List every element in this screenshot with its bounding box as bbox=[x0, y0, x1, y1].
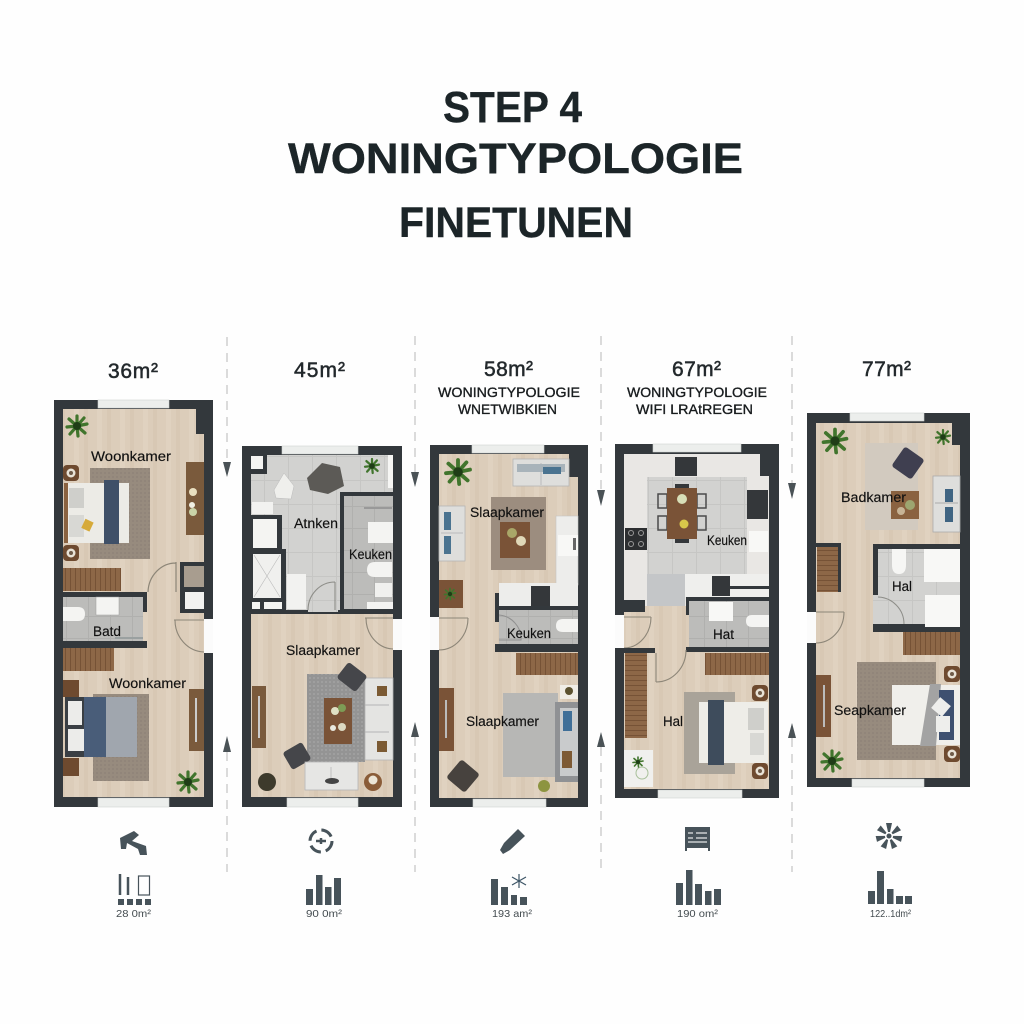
tv console bbox=[252, 686, 266, 748]
sofa top bbox=[513, 459, 569, 486]
panel: floor plan 45m2 bbox=[242, 446, 402, 807]
panel: floor plan 58m2: Slaapkamer bbox=[470, 505, 545, 520]
bar chart: 190 om2 bbox=[676, 870, 721, 920]
console bbox=[186, 462, 204, 535]
icon: target 45m2 bbox=[310, 830, 332, 852]
sofa left bbox=[439, 506, 465, 561]
bar chart: 122..1dm2: 122..1dm² bbox=[870, 908, 911, 920]
panel: floor plan 45m2: Keuken bbox=[349, 547, 392, 562]
title: FINETUNEN bbox=[399, 199, 633, 247]
arrow: divider 2 bbox=[411, 336, 419, 872]
size heading and subtitle: 67m2: WIFI LRAtREGEN bbox=[636, 401, 753, 417]
icon: fan 77m2 bbox=[876, 823, 902, 849]
counter bbox=[685, 574, 769, 601]
panel: floor plan 67m2: Keuken bbox=[707, 533, 747, 548]
panel: floor plan 36m2: Woonkamer bbox=[91, 449, 172, 464]
panel: floor plan 77m2: Badkamer bbox=[841, 490, 907, 505]
bed bbox=[892, 684, 960, 746]
size heading: 36m2: 36m² bbox=[108, 360, 158, 383]
sofa bbox=[933, 476, 960, 532]
title bbox=[288, 83, 743, 247]
panel: floor plan 36m2: Batd bbox=[93, 624, 121, 639]
bar chart: 190 om2: 190 om² bbox=[677, 908, 719, 920]
panel: floor plan 77m2 bbox=[807, 413, 970, 787]
panel: floor plan 67m2 bbox=[615, 444, 779, 798]
bathroom bbox=[873, 544, 960, 632]
counter bbox=[495, 583, 578, 610]
bathroom bbox=[686, 601, 769, 652]
closet bbox=[180, 562, 204, 613]
keuken room bbox=[340, 492, 393, 614]
bar chart: 90 0m2 bbox=[306, 875, 343, 920]
console bbox=[439, 688, 454, 751]
bed bbox=[64, 480, 129, 544]
icon: cabinet 67m2 bbox=[685, 827, 710, 851]
dining table bbox=[658, 484, 706, 543]
bar chart: 193 am2: 193 am² bbox=[492, 908, 533, 920]
icon: tools with area 28 0m2 bbox=[116, 874, 152, 920]
icon: furniture 36m2 bbox=[120, 831, 147, 855]
sofa grey bbox=[555, 702, 578, 782]
bed bbox=[699, 700, 768, 765]
bed bbox=[65, 694, 149, 781]
panel: floor plan 77m2: Hal bbox=[892, 579, 912, 594]
panel: floor plan 36m2: Woonkamer bbox=[109, 676, 187, 691]
size heading and subtitle: 58m2 bbox=[438, 358, 580, 417]
storage blocks bbox=[251, 455, 393, 514]
arrow: divider 1 bbox=[223, 337, 231, 872]
size heading and subtitle: 58m2: WNETWIBKIEN bbox=[458, 401, 557, 417]
table bbox=[891, 491, 919, 519]
panel: floor plan 67m2: Hal bbox=[663, 714, 683, 729]
table bbox=[500, 522, 530, 558]
panel: floor plan 58m2 bbox=[430, 445, 588, 807]
panel: floor plan 58m2: Slaapkamer bbox=[466, 714, 539, 729]
bathroom bbox=[63, 592, 147, 648]
title: STEP 4 bbox=[443, 83, 582, 132]
panel: floor plan 77m2: Seapkamer bbox=[834, 703, 907, 718]
size heading and subtitle: 58m2: WONINGTYPOLOGIE bbox=[438, 384, 580, 400]
side table bbox=[439, 580, 463, 608]
size heading and subtitle: 67m2: 67m² bbox=[672, 358, 721, 381]
title: WONINGTYPOLOGIE bbox=[288, 135, 743, 183]
kitchen unit bbox=[556, 516, 578, 585]
coffee table bbox=[324, 698, 352, 744]
bar chart: 90 0m2: 90 0m² bbox=[306, 908, 343, 920]
bathroom bbox=[495, 610, 578, 652]
panel: floor plan 45m2: Slaapkamer bbox=[286, 643, 361, 658]
side table bbox=[624, 750, 653, 787]
tv console bbox=[816, 675, 831, 737]
panel: floor plan 58m2: Keuken bbox=[507, 626, 551, 641]
bar chart: 193 am2 bbox=[491, 874, 533, 920]
size heading and subtitle: 58m2: 58m² bbox=[484, 358, 533, 381]
stove bbox=[625, 528, 647, 550]
tv console bbox=[189, 689, 204, 751]
size heading: 45m2: 45m² bbox=[294, 359, 345, 382]
size heading and subtitle: 67m2: WONINGTYPOLOGIE bbox=[627, 384, 767, 400]
panel: floor plan 36m2 bbox=[54, 400, 213, 807]
bar chart: 122..1dm2 bbox=[868, 871, 912, 920]
storage left bbox=[816, 543, 841, 592]
icon: tools with area 28 0m2: 28 0m² bbox=[116, 908, 152, 920]
arrow: divider 4 bbox=[788, 336, 796, 872]
size heading: 77m2: 77m² bbox=[862, 358, 911, 381]
sofa right bbox=[365, 678, 393, 760]
wet cells bbox=[251, 515, 286, 610]
panel: floor plan 45m2: Atnken bbox=[294, 516, 338, 531]
sofa bottom bbox=[305, 762, 358, 790]
size heading and subtitle: 67m2 bbox=[627, 358, 767, 417]
arrow: divider 3 bbox=[597, 336, 605, 872]
panel: floor plan 67m2: Hat bbox=[713, 627, 734, 642]
icon: pencil 58m2 bbox=[500, 829, 525, 854]
